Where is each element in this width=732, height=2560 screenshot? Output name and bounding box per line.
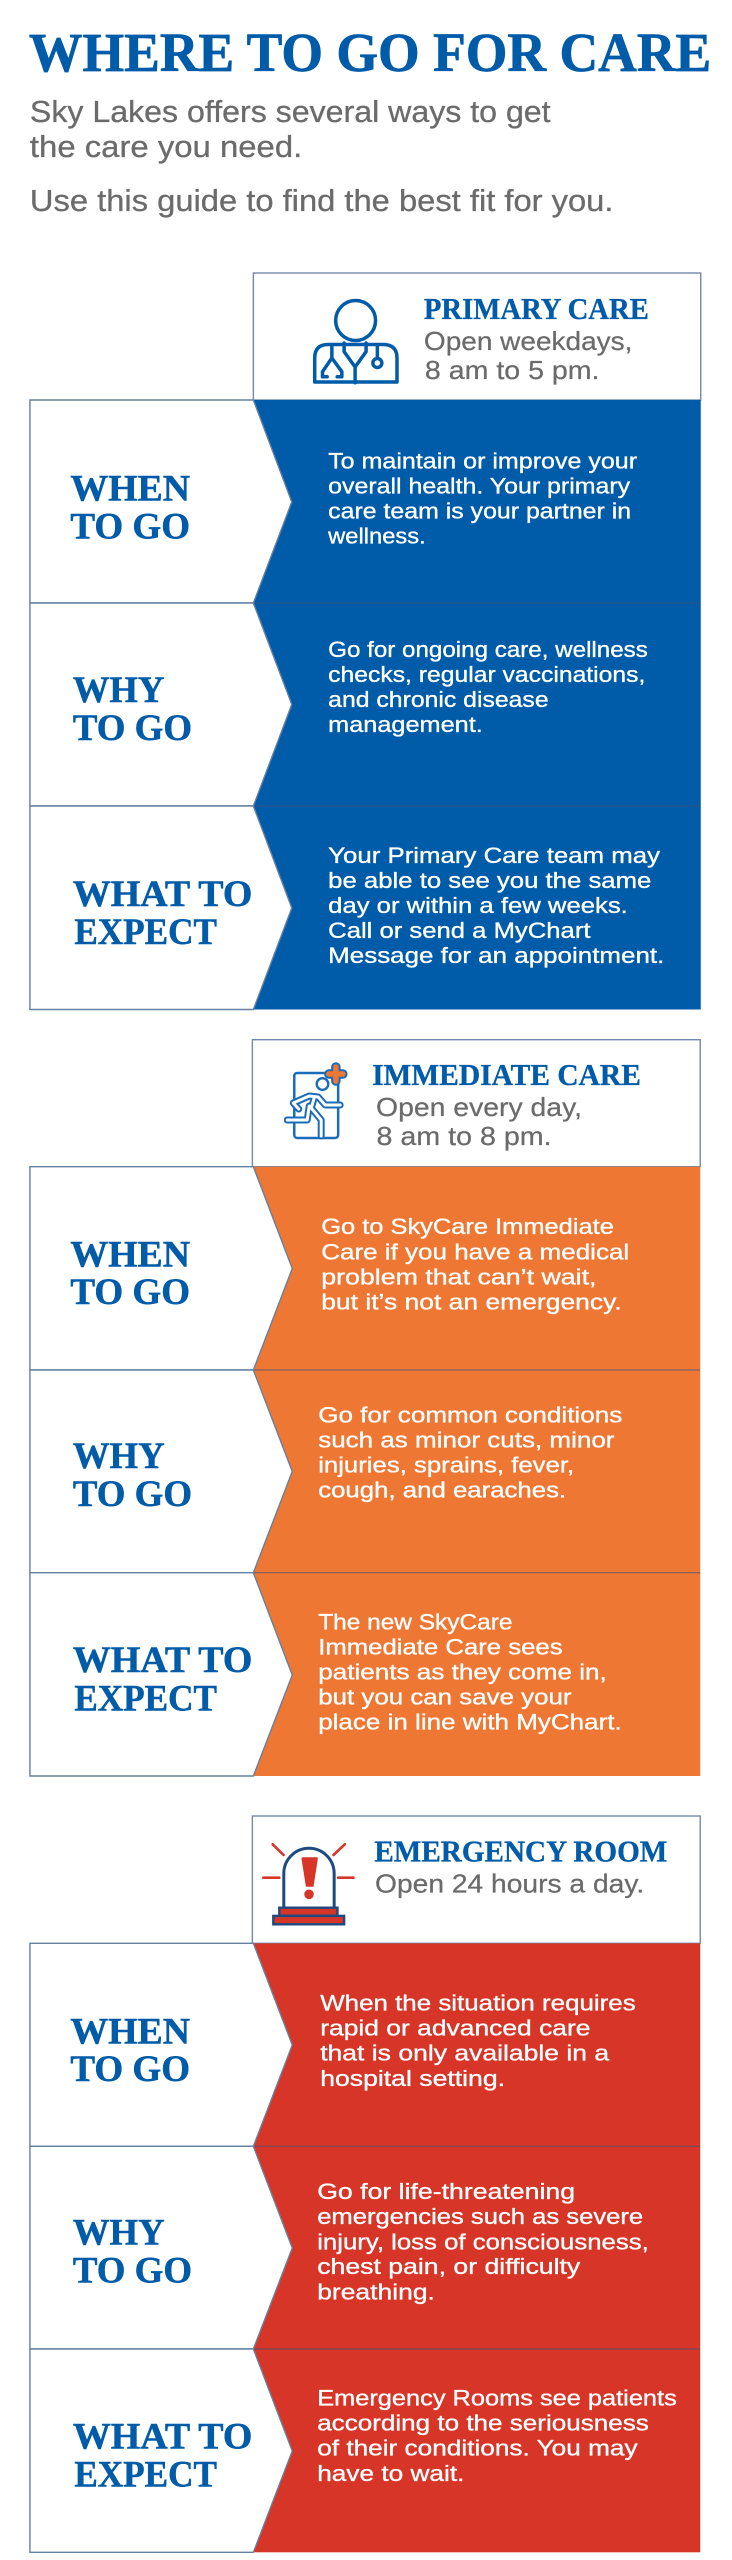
row: what to expect: place in line with MyChart. [318,1709,622,1734]
red background [252,1943,700,2552]
row: why to go: WHY [73,2212,165,2252]
row: when to go: rapid or advanced care [320,2016,591,2041]
row: when to go: overall health. Your primary [328,473,631,499]
row: what to expect: patients as they come in, [318,1659,607,1684]
emergency room hours: Open 24 hours a day. [375,1870,644,1898]
intro text: Use this guide to find the best fit for you. [30,184,613,218]
row: why to go: TO GO [73,2251,192,2291]
emergency room header box [252,1816,700,1943]
row: why to go [30,1370,700,1573]
row: why to go: TO GO [73,708,192,748]
row: why to go: Go for ongoing care, wellness [328,637,648,662]
row: what to expect: according to the seriousness [317,2411,649,2436]
immediate care header box [252,1040,700,1167]
row: why to go: management. [328,712,483,737]
row: when to go: problem that can’t wait, [321,1264,597,1290]
row: why to go: breathing. [317,2279,435,2304]
immediate care hours [376,1094,582,1151]
row: why to go [30,2146,700,2349]
row: why to go: Go for life-threatening [317,2179,575,2204]
immediate care heading: IMMEDIATE CARE [372,1058,641,1092]
row: what to expect: Call or send a MyChart [328,918,591,943]
row: when to go [30,400,701,603]
row: what to expect [30,806,664,1010]
row: what to expect: The new SkyCare [318,1609,513,1634]
blue background [253,400,701,1010]
icon: person running through door [287,1067,343,1138]
row: what to expect: day or within a few weeks. [328,893,628,918]
row: when to go: that is only available in a [320,2041,610,2066]
row: what to expect: Your Primary Care team may [328,843,661,868]
row: why to go: WHY [73,670,164,710]
row: when to go: Go to SkyCare Immediate [321,1214,614,1239]
row: why to go: chest pain, or difficulty [317,2254,581,2279]
row: why to go: cough, and earaches. [318,1478,566,1503]
row: what to expect: have to wait. [317,2461,464,2486]
row: what to expect: Emergency Rooms see patients [317,2386,677,2411]
row: when to go [30,1167,700,1370]
row: what to expect: EXPECT [74,912,217,952]
intro text [30,95,613,218]
row: why to go: TO GO [73,1474,192,1514]
row: why to go: WHY [73,1436,165,1476]
row: when to go: When the situation requires [320,1991,636,2016]
intro text: the care you need. [30,130,302,164]
row: why to go: and chronic disease [328,687,549,712]
row: when to go: TO GO [70,506,190,547]
row: why to go: injuries, sprains, fever, [318,1453,574,1478]
row: what to expect: Immediate Care sees [318,1634,563,1659]
row: when to go: Care if you have a medical [321,1239,629,1264]
row: what to expect: but you can save your [318,1684,572,1709]
primary care hours: Open weekdays, [424,328,632,356]
title: WHERE TO GO FOR CARE [29,22,711,83]
row: when to go: WHEN [70,2011,190,2051]
orange background [252,1167,700,1776]
primary care hours [424,328,632,385]
row: when to go: WHEN [70,468,190,509]
row: what to expect: WHAT TO [73,1640,252,1680]
row: what to expect: WHAT TO [73,874,252,914]
immediate care hours: Open every day, [376,1094,582,1122]
row: what to expect [30,2349,677,2552]
row: what to expect: be able to see you the same [328,868,651,893]
row: when to go: TO GO [70,2049,190,2089]
intro text: Sky Lakes offers several ways to get [30,95,551,129]
row: what to expect: Message for an appointment. [328,943,664,968]
row: when to go: wellness. [327,523,426,549]
emergency room heading: EMERGENCY ROOM [374,1834,667,1868]
panel: primary care [30,273,701,1010]
row: when to go: hospital setting. [320,2066,505,2091]
row: when to go: To maintain or improve your [328,448,638,473]
row: why to go: emergencies such as severe [317,2204,643,2229]
row: when to go: but it’s not an emergency. [321,1289,622,1314]
row: when to go: WHEN [70,1235,190,1275]
row: when to go: TO GO [70,1272,190,1312]
primary care hours: 8 am to 5 pm. [425,357,599,385]
row: what to expect: EXPECT [74,2455,217,2495]
primary care heading: PRIMARY CARE [424,292,649,326]
panel: emergency room [30,1816,700,2552]
row: why to go [30,603,701,806]
icon: emergency siren [263,1844,353,1924]
row: what to expect: EXPECT [74,1679,217,1719]
row: why to go: Go for common conditions [318,1403,622,1428]
icon: doctor with stethoscope [315,300,397,383]
row: why to go: injury, loss of consciousness, [317,2229,649,2254]
primary care header box [253,273,701,400]
row: what to expect: WHAT TO [73,2416,252,2456]
row: when to go: care team is your partner in [328,498,631,524]
panel: immediate care [30,1040,700,1776]
row: when to go [30,1943,700,2146]
row: why to go: checks, regular vaccinations, [328,662,645,687]
row: what to expect [30,1573,622,1776]
row: what to expect: of their conditions. You may [317,2436,639,2461]
row: why to go: such as minor cuts, minor [318,1428,615,1453]
immediate care hours: 8 am to 8 pm. [377,1123,552,1151]
